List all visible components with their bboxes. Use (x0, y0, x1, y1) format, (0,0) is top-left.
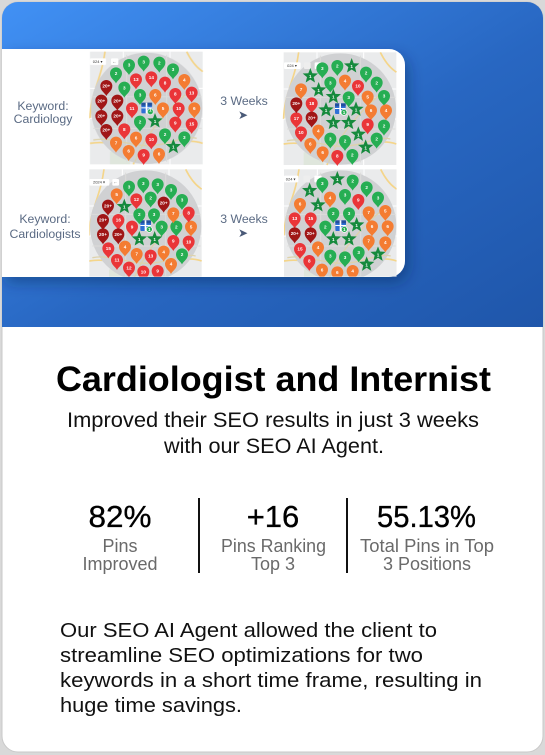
map: Cardiology after: 1 (325, 108, 328, 113)
map: Cardiologists before: 13 (148, 253, 154, 258)
map: Cardiology before: 20+ (113, 98, 122, 103)
map: Cardiology before: 8 (123, 127, 126, 132)
map: Cardiologists before: 5 (115, 192, 118, 197)
map: Cardiologists before: 16 (116, 218, 121, 223)
map: Cardiology before: 2 (139, 119, 142, 124)
map: Cardiology after: 1 (357, 132, 360, 137)
map: Cardiologists before: 3 (181, 198, 184, 203)
map: Cardiologists before: 10 (141, 269, 146, 274)
map: Cardiologists after: 2 (351, 178, 354, 183)
map: Cardiologists after: 6 (336, 270, 339, 275)
map: Cardiology before: 6 (193, 106, 196, 111)
map: Cardiologists before: 1 (123, 205, 126, 210)
subtitle: Improved their SEO results in just 3 weeks (67, 409, 479, 432)
map: Cardiology before: 20+ (97, 114, 106, 119)
map: Cardiologists before: 1 (153, 237, 156, 242)
map: Cardiology after: 1 (364, 145, 367, 150)
stat: +16 pins ranking top 3: +16 (247, 499, 299, 534)
map: Cardiology after: 7 (300, 87, 303, 92)
map: Cardiology after: 20+ (308, 115, 316, 120)
map: Cardiology before: 9 (142, 153, 145, 158)
stat: +16 pins ranking top 3: Top 3 (251, 554, 295, 574)
map: Cardiology before: 2 (115, 71, 118, 76)
blue hero panel (2, 2, 543, 327)
map: Cardiologists before: 10 (186, 239, 192, 244)
map: Cardiologists after: 3 (348, 211, 351, 216)
map: Cardiologists after: 13 (292, 216, 298, 221)
duration label: first row: 3 Weeks (220, 94, 268, 108)
map: Cardiology after: 1 (343, 110, 346, 115)
map: Cardiologists before: 4 (124, 244, 127, 249)
map: Cardiology after: 20+ (292, 101, 301, 106)
map: Cardiology before: 3 (139, 93, 142, 98)
map: Cardiologists after: 3 (321, 181, 324, 186)
keyword label: Cardiology (14, 101, 72, 126)
map: Cardiologists before: 7 (172, 211, 175, 216)
duration label: first row (220, 96, 268, 119)
duration label: first row: ➤ (238, 108, 248, 122)
map: Cardiology after: 9 (366, 122, 369, 127)
map: Cardiologists before: 1 (148, 227, 151, 232)
map: Cardiology after: 5 (366, 94, 369, 99)
map: Cardiologists after: 1 (365, 262, 368, 267)
map: Cardiologists after (284, 169, 397, 282)
map: Cardiology before: 5 (162, 106, 165, 111)
map: Cardiology after: 6 (370, 108, 373, 113)
body paragraph: Our SEO AI Agent allowed the client to (60, 620, 437, 642)
map: Cardiologists after: 3 (344, 255, 347, 260)
map: Cardiology after: 4 (317, 128, 320, 133)
map: Cardiology after: 2 (344, 139, 347, 144)
keyword label: Cardiology: Cardiology (14, 112, 73, 126)
map: Cardiologists before: 12 (126, 265, 132, 270)
map: Cardiologists before: 3 (160, 224, 163, 229)
map: Cardiologists before: 9 (156, 269, 159, 274)
map: Cardiologists before: 20+ (160, 200, 168, 205)
map: Cardiology before: 20+ (113, 114, 122, 119)
stat: 55.13% total pins in top 3 positions: 55.13% (377, 499, 476, 534)
map: Cardiologists before: 4 (162, 249, 165, 254)
body paragraph: keywords in a short time frame, resulting in (60, 670, 482, 692)
body paragraph: streamline SEO optimizations for two (60, 645, 423, 667)
stat: 55.13% total pins in top 3 positions: 3 Positions (383, 554, 471, 574)
map: Cardiology before: 14 (149, 75, 154, 80)
map: Cardiologists after: 20+ (291, 231, 299, 236)
map: Cardiology after: 3 (329, 80, 332, 85)
map: Cardiology after: 1 (347, 121, 350, 126)
map: Cardiologists after: 1 (343, 227, 346, 232)
map: Cardiologists after: 15 (297, 247, 303, 252)
map: Cardiology before: 20+ (102, 128, 111, 133)
map: Cardiologists after: 2 (332, 211, 335, 216)
map: Cardiology before: 6 (154, 93, 157, 98)
map: Cardiology after: 1 (332, 95, 335, 100)
duration label: second row (220, 214, 268, 237)
map: Cardiology before: 2 (158, 60, 161, 65)
map: Cardiologists after: 1 (332, 237, 335, 242)
map: Cardiologists before: 9 (131, 224, 134, 229)
keyword label: Cardiology: Keyword: (17, 99, 69, 113)
map: Cardiologists after: 2 (324, 224, 327, 229)
map: Cardiology after: 2 (383, 123, 386, 128)
map: Cardiologists before: 20+ (114, 232, 123, 237)
map: Cardiology after: 2 (365, 70, 368, 75)
map: Cardiologists after: 20+ (307, 231, 315, 236)
map: Cardiologists before: 2 (181, 252, 184, 257)
map: Cardiology before: 3 (142, 59, 145, 64)
map: Cardiologists after: 4 (329, 195, 332, 200)
map: Cardiologists before: 5 (190, 224, 193, 229)
map: Cardiology after: 6 (309, 142, 312, 147)
subtitle (67, 409, 479, 458)
map: Cardiology after: 17 (294, 116, 299, 121)
map: Cardiology before: 13 (189, 90, 195, 95)
map: Cardiologists before: 2 (175, 224, 178, 229)
map: Cardiology before: 13 (133, 77, 139, 82)
map: Cardiologists after: 1 (317, 203, 320, 208)
keyword label: Cardiologists (9, 212, 81, 241)
map: Cardiology after: 024 ▾ (287, 63, 297, 68)
map: Cardiologists after: 1 (377, 252, 380, 257)
map: Cardiology before: 3 (183, 135, 186, 140)
map: Cardiologists before: 2 (149, 195, 152, 200)
map: Cardiologists after: 1 (355, 223, 358, 228)
map: Cardiologists after: 4 (351, 269, 354, 274)
map: Cardiology after: 4 (385, 108, 388, 113)
map: Cardiology after: 3 (329, 136, 332, 141)
map: Cardiologists before: 1 (138, 237, 141, 242)
map: Cardiologists after: 15 (308, 216, 314, 221)
map: Cardiologists before: 2024 ▾ (93, 180, 105, 185)
map: Cardiology after: 6 (321, 150, 324, 155)
map: Cardiology after: 3 (347, 95, 350, 100)
map: Cardiologists before: 3 (128, 184, 131, 189)
stat: 55.13% total pins in top 3 positions (360, 499, 494, 574)
map: Cardiologists after: 1 (336, 177, 339, 182)
map: Cardiology before: 3 (123, 85, 126, 90)
map: Cardiologists after: 3 (344, 193, 347, 198)
map: Cardiologists after: 6 (386, 224, 389, 229)
body paragraph (60, 620, 482, 717)
map: Cardiology before: 024 ▾ (93, 59, 103, 64)
map: Cardiology after: 8 (336, 154, 339, 159)
map: Cardiologists before: 3 (170, 188, 173, 193)
stat: +16 pins ranking top 3: Pins Ranking (221, 536, 326, 556)
map: Cardiologists before: 3 (153, 212, 156, 217)
map: Cardiologists before: 12 (134, 197, 139, 202)
map: Cardiology before: 20+ (102, 84, 111, 89)
map: Cardiology before: 4 (183, 78, 186, 83)
map: Cardiology before: 6 (127, 149, 130, 154)
keyword label: Cardiologists: Keyword: (19, 212, 71, 226)
map: Cardiology before: 1 (172, 145, 175, 150)
map: Cardiologists before: 20+ (104, 203, 112, 208)
map: Cardiology before: 3 (172, 67, 175, 72)
body paragraph: huge time savings. (60, 695, 242, 717)
stat: 82% pins improved: Improved (82, 554, 158, 574)
stat: +16 pins ranking top 3 (221, 499, 326, 574)
map: Cardiology after: 1 (350, 64, 353, 69)
map: Cardiologists after: 7 (367, 239, 370, 244)
map: Cardiologists after: 6 (299, 202, 302, 207)
map: Cardiologists before: 11 (115, 258, 120, 263)
stat: 82% pins improved: 82% (88, 499, 152, 534)
map: Cardiology after: 18 (309, 101, 315, 106)
keyword label: Cardiologists: Cardiologists (9, 227, 81, 241)
title: Cardiologist and Internist (56, 360, 491, 399)
map: Cardiologists after: 5 (384, 209, 387, 214)
map: Cardiology after: 2 (336, 64, 339, 69)
map: Cardiologists after: 7 (367, 210, 370, 215)
map: Cardiology after: 2 (351, 153, 354, 158)
map: Cardiologists after: 1 (348, 237, 351, 242)
map: Cardiology after: 10 (355, 84, 361, 89)
map: Cardiologists after: 3 (357, 250, 360, 255)
map: Cardiology after: 3 (321, 66, 324, 71)
map: Cardiology after: 1 (309, 74, 312, 79)
map: Cardiology after: 2 (375, 80, 378, 85)
map: Cardiology after: 1 (332, 121, 335, 126)
map: Cardiology before: 15 (189, 122, 195, 127)
subtitle: with our SEO AI Agent. (163, 435, 384, 458)
map: Cardiologists before: 9 (172, 239, 175, 244)
stat: 55.13% total pins in top 3 positions: Total Pins in Top (360, 536, 494, 556)
map: Cardiologists after: 3 (329, 253, 332, 258)
stat: 82% pins improved (82, 499, 158, 574)
map: Cardiology before: 6 (158, 152, 161, 157)
map: Cardiologists before: 3 (156, 182, 159, 187)
map: Cardiologists after: 6 (371, 224, 374, 229)
map: Cardiologists before: 20+ (99, 218, 107, 223)
map: Cardiology before: 1 (149, 108, 152, 113)
map: Cardiologists after: 4 (317, 245, 320, 250)
map: Cardiologists after: → (316, 176, 320, 181)
map: Cardiologists after: 4 (384, 240, 387, 245)
map: Cardiologists before: 8 (187, 210, 190, 215)
map: Cardiology before: 11 (130, 106, 135, 111)
map: Cardiology after (284, 52, 396, 166)
map: Cardiology before: 2 (164, 132, 167, 137)
map: Cardiologists before: 2 (138, 212, 141, 217)
map: Cardiologists after: 9 (357, 198, 360, 203)
map: Cardiology after: 3 (383, 94, 386, 99)
map: Cardiology after: 2 (375, 136, 378, 141)
map: Cardiologists after: 1 (308, 189, 311, 194)
map: Cardiologists after: 8 (308, 259, 311, 264)
map: Cardiologists before: 15 (106, 246, 111, 251)
map: Cardiologists after: 6 (321, 267, 324, 272)
map: Cardiologists before: 4 (170, 262, 173, 267)
map: Cardiologists after: 3 (377, 195, 380, 200)
map: Cardiologists before (89, 169, 202, 282)
map: Cardiology after: → (316, 63, 320, 68)
map: Cardiology before: 1 (154, 119, 157, 124)
map: Cardiologists before: 3 (142, 181, 145, 186)
map: Cardiology before (90, 52, 203, 165)
map: Cardiologists after: 024 ▾ (286, 176, 296, 181)
map: Cardiologists after: 2 (365, 185, 368, 190)
map: Cardiology before: 8 (174, 92, 177, 97)
map: Cardiology before: 8 (164, 80, 167, 85)
map: Cardiology before: 20+ (97, 98, 106, 103)
results panel (2, 49, 405, 282)
duration label: second row: 3 Weeks (220, 212, 268, 226)
map: Cardiology after: 4 (344, 78, 347, 83)
map: Cardiology after: 1 (355, 107, 358, 112)
map: Cardiology before: 7 (115, 140, 118, 145)
map: Cardiologists before: 20+ (99, 232, 107, 237)
map: Cardiology before: 9 (174, 120, 177, 125)
map: Cardiology before: 10 (176, 106, 182, 111)
map: Cardiology after: 10 (298, 130, 304, 135)
map: Cardiology before: ← (113, 59, 117, 64)
duration label: second row: ➤ (238, 226, 248, 240)
map: Cardiology after: 1 (317, 88, 320, 93)
map: Cardiologists before: ← (114, 180, 118, 185)
map: Cardiology before: 3 (128, 63, 131, 68)
map: Cardiology before: 6 (135, 135, 138, 140)
map: Cardiology before: 10 (149, 137, 154, 142)
stat: 82% pins improved: Pins (102, 536, 138, 556)
map: Cardiologists before: 7 (135, 252, 138, 257)
